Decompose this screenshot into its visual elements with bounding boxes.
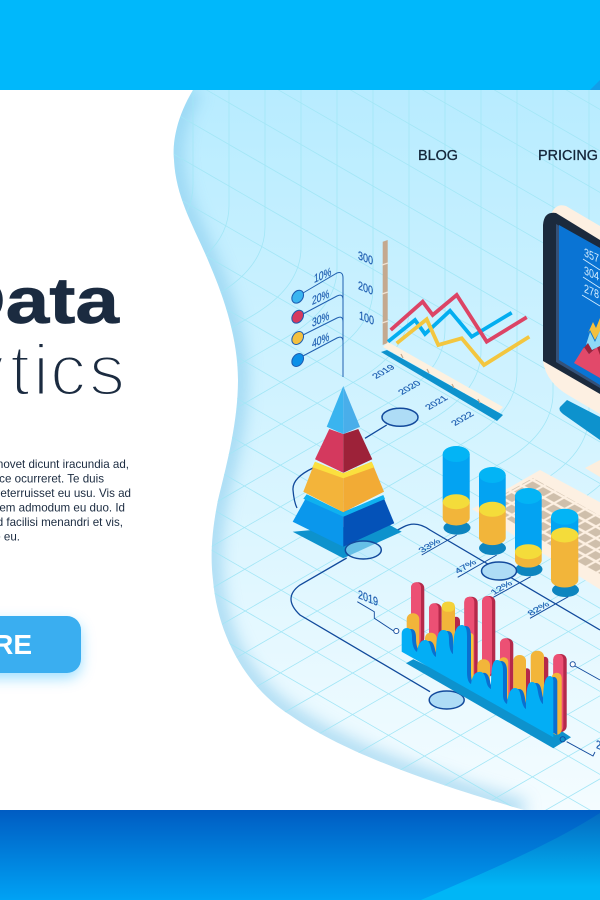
x axis bbox=[383, 342, 503, 412]
cylinder 1 bbox=[443, 446, 470, 535]
axis labels: 2022 bbox=[449, 410, 477, 428]
annotation: right ring bbox=[570, 662, 600, 680]
percentage labels: 82% bbox=[526, 600, 552, 618]
paragraph bbox=[0, 458, 131, 544]
bottom band bbox=[0, 810, 600, 900]
monitor bezel bbox=[543, 213, 600, 394]
legend connectors bbox=[303, 273, 343, 377]
cylinder 4 bbox=[551, 509, 579, 597]
axis labels: 2020 bbox=[396, 379, 424, 397]
wave chart shadow bbox=[406, 659, 571, 748]
cylinder 3 bbox=[515, 488, 542, 576]
axis labels: 2021 bbox=[423, 394, 451, 412]
percentage labels: 47% bbox=[453, 558, 479, 576]
trackpad bbox=[585, 460, 600, 477]
nav: blog: BLOG bbox=[418, 148, 458, 164]
percentage labels: 12% bbox=[489, 579, 515, 597]
callout ellipse: pyramid top bbox=[382, 408, 418, 426]
annotation: 2022 bbox=[560, 737, 600, 759]
background blob with grid bbox=[174, 90, 600, 810]
axis labels: 300 bbox=[358, 249, 373, 268]
callout ellipse: pyramid base bbox=[345, 541, 381, 559]
button: explore bbox=[0, 616, 81, 678]
callout ellipse: center bbox=[482, 562, 516, 580]
legend labels: 30% bbox=[312, 309, 330, 330]
keyboard bbox=[472, 470, 600, 602]
monitor body bbox=[543, 205, 600, 414]
wave bar chart bbox=[402, 582, 571, 748]
wave front bbox=[402, 625, 553, 737]
axis labels: 200 bbox=[358, 279, 373, 298]
annotation: 2019 bbox=[357, 588, 399, 634]
top band bbox=[0, 0, 600, 90]
axis labels: 2019 bbox=[370, 363, 398, 381]
legend labels: 40% bbox=[312, 330, 330, 351]
callout ellipse: bottom bbox=[429, 691, 464, 709]
legend labels: 20% bbox=[312, 287, 330, 308]
screen numbers: 304 bbox=[584, 264, 599, 284]
screen numbers: 278 bbox=[584, 282, 599, 302]
screen numbers: 357 bbox=[584, 246, 599, 266]
monitor bbox=[543, 205, 600, 440]
pyramid top bbox=[327, 386, 343, 434]
monitor stand bbox=[559, 400, 600, 440]
axis labels bbox=[358, 249, 477, 428]
pyramid shadow bbox=[293, 523, 402, 558]
screen numbers bbox=[582, 246, 600, 306]
y axis bbox=[383, 240, 388, 345]
legend dots bbox=[289, 288, 306, 369]
red bars bbox=[411, 582, 567, 732]
percentage labels: 33% bbox=[417, 537, 443, 555]
pyramid blue tier bbox=[293, 496, 343, 547]
line: red bbox=[391, 295, 527, 342]
connector loop bbox=[291, 425, 600, 692]
legend bbox=[289, 265, 343, 377]
cylinder 2 bbox=[479, 467, 506, 555]
pyramid red tier bbox=[315, 429, 343, 473]
legend labels: 10% bbox=[314, 265, 332, 286]
line chart bbox=[358, 240, 529, 428]
wave side bbox=[406, 626, 557, 735]
axis labels: 100 bbox=[359, 309, 374, 328]
pyramid yellow tier bbox=[303, 462, 343, 512]
cylinder chart bbox=[443, 446, 579, 597]
line: yellow bbox=[397, 319, 529, 365]
line: blue bbox=[388, 311, 512, 342]
screen mountain chart bbox=[574, 318, 600, 378]
monitor screen bbox=[556, 224, 600, 388]
axis base shadow bbox=[381, 350, 503, 421]
nav: pricing: PRICING bbox=[538, 148, 598, 164]
yellow bars bbox=[407, 602, 562, 735]
legend labels bbox=[312, 265, 332, 351]
annotation: 2019: 2019 bbox=[358, 588, 378, 609]
percentage labels bbox=[417, 535, 568, 618]
pyramid chart bbox=[293, 386, 402, 558]
